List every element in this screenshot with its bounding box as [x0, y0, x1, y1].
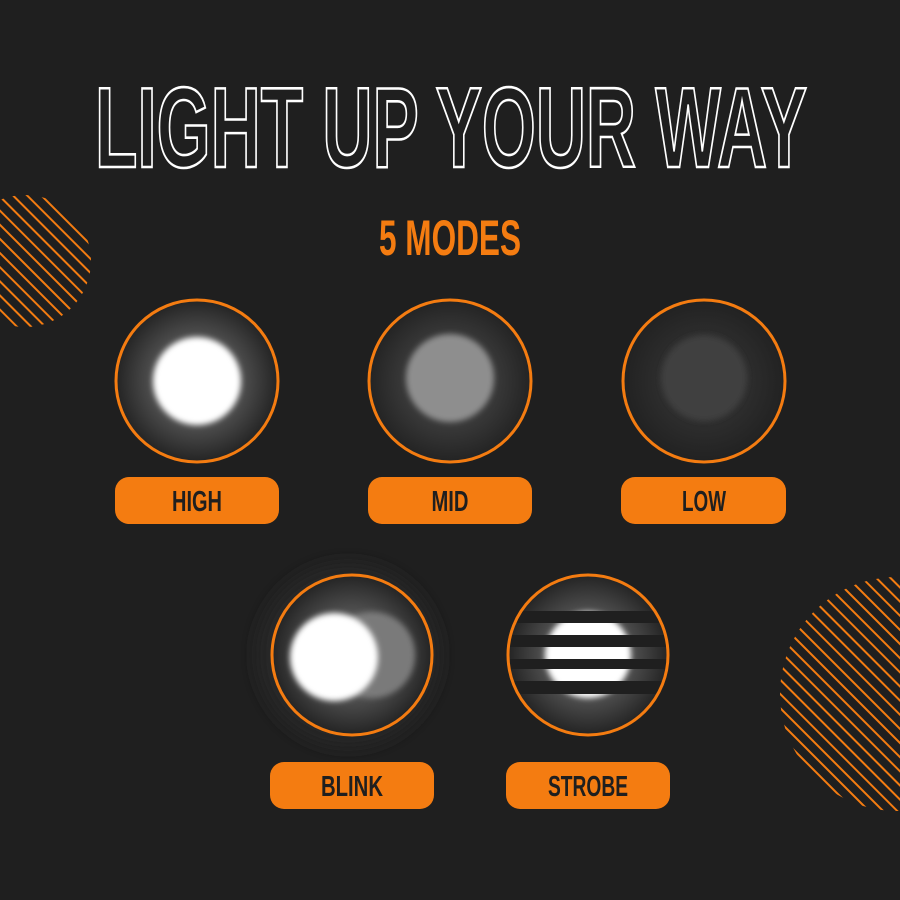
mode: BLINK: BLINK: [321, 771, 383, 803]
mode: BLINK: [256, 563, 440, 809]
decorative striped circle left: [0, 195, 91, 327]
mode: HIGH: [115, 300, 279, 524]
subtitle: 5 MODES: [379, 210, 521, 266]
mode: LOW: [621, 300, 786, 524]
mode: HIGH: HIGH: [172, 486, 222, 518]
mode: LOW: LOW: [682, 486, 726, 518]
mode: STROBE: [500, 575, 680, 809]
mode: MID: [368, 300, 532, 524]
mode: STROBE: STROBE: [548, 771, 628, 803]
mode: MID: MID: [432, 486, 468, 518]
decorative striped circle right: [780, 577, 900, 811]
